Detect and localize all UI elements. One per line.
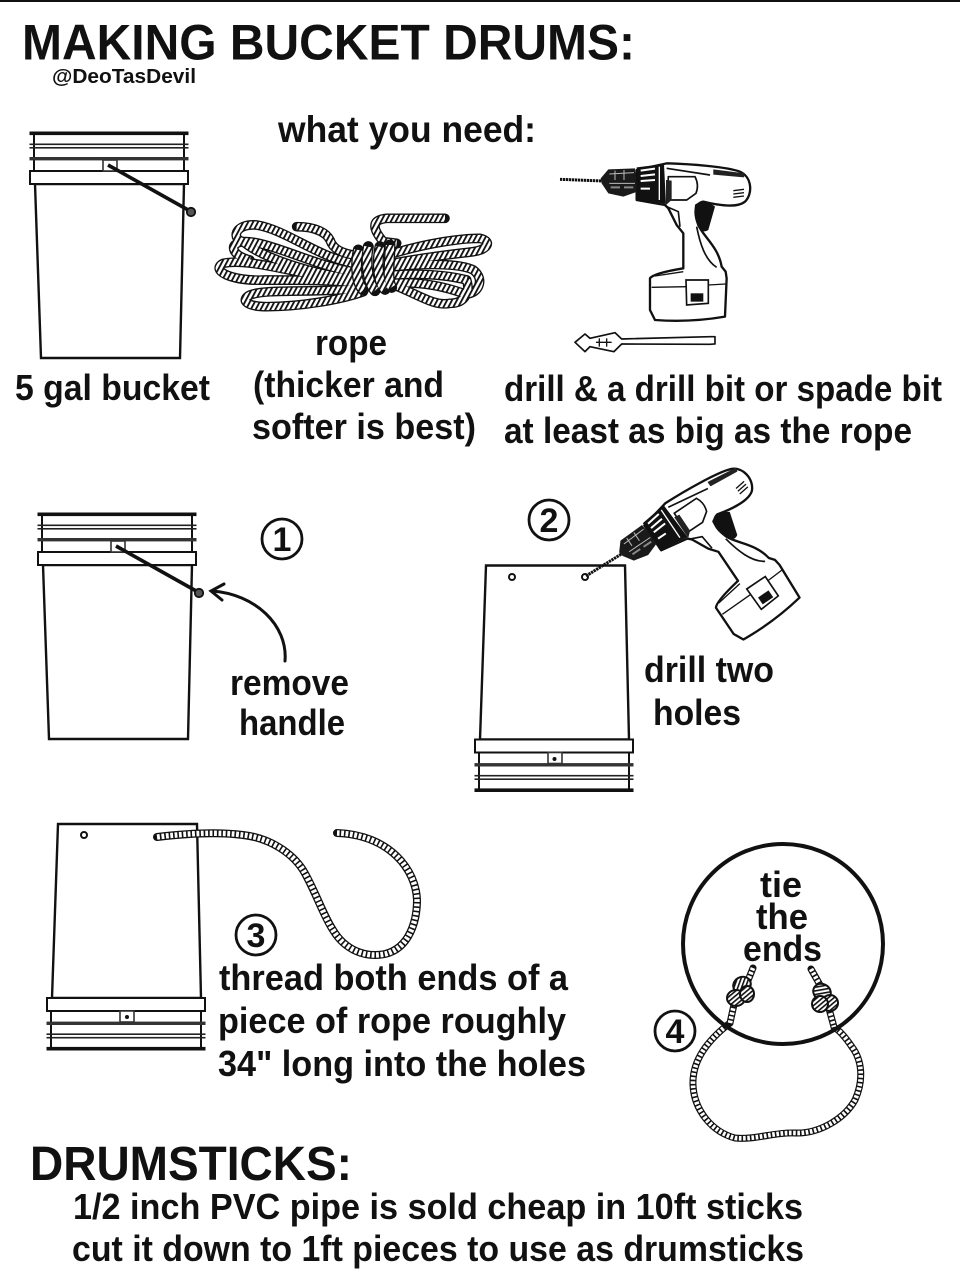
label: thread instructions: 34" long into the holes (218, 1043, 586, 1084)
label: 5 gal bucket: 5 gal bucket (15, 367, 210, 408)
label: rope: rope (315, 322, 387, 363)
label: thread instructions: piece of rope roughly (218, 1000, 566, 1041)
label: tie the ends (743, 864, 822, 969)
author handle: @DeoTasDevil (52, 66, 196, 88)
step 3: upside-down bucket (46, 824, 206, 1050)
label: thread instructions (218, 957, 586, 1084)
step number 4: 4 (666, 1013, 685, 1051)
label: drill two holes: drill two (644, 649, 774, 690)
step 1: bucket with handle (38, 512, 203, 739)
step number 1: 1 (273, 521, 291, 559)
label: remove handle: remove (230, 662, 349, 703)
label: tie the ends: ends (743, 928, 822, 969)
step number 2: 2 (540, 502, 558, 540)
heading: drumsticks: DRUMSTICKS: (30, 1138, 352, 1191)
step number 3 (236, 915, 276, 955)
drumsticks instructions: 1/2 inch PVC pipe is sold cheap in 10ft sticks (73, 1186, 803, 1227)
rope ends hatch (730, 968, 834, 1027)
icon: drill drilling hole (577, 456, 823, 693)
step number 4 (655, 1011, 695, 1051)
label: rope: (thicker and (253, 364, 444, 405)
label: remove handle (230, 662, 349, 743)
top border line (0, 0, 960, 2)
rope ends (730, 968, 834, 1027)
label: rope (252, 322, 476, 447)
label: rope: softer is best) (252, 406, 476, 447)
title: MAKING BUCKET DRUMS: (22, 14, 635, 70)
step number 2 (529, 500, 569, 540)
label: thread instructions: thread both ends of a (219, 957, 569, 998)
knot: right (810, 981, 838, 1012)
label: drill two holes: holes (653, 692, 741, 733)
label: drill and bit: at least as big as the rope (504, 410, 912, 451)
knot: left (727, 974, 754, 1006)
drumsticks instructions: cut it down to 1ft pieces to use as drumsticks (72, 1228, 804, 1269)
rope loop with knots (693, 968, 861, 1138)
icon: cordless drill (560, 163, 750, 321)
rope threaded through bucket (157, 833, 417, 955)
label: tie the ends: tie (760, 864, 802, 905)
label: remove handle: handle (239, 702, 345, 743)
icon: bucket with handle (30, 132, 195, 358)
label: drill and bit (504, 368, 942, 451)
heading: what you need: what you need: (277, 109, 536, 150)
icon: coiled rope (219, 218, 487, 307)
label: tie the ends: the (756, 896, 808, 937)
drumsticks instructions (72, 1186, 804, 1269)
arrow: to handle (211, 584, 285, 661)
icon: spade bit (575, 333, 715, 352)
step number 1 (262, 519, 302, 559)
magnifier circle (683, 844, 883, 1044)
step 2: upside-down bucket with holes (474, 566, 634, 792)
step number 3: 3 (247, 917, 265, 955)
label: drill two holes (644, 649, 774, 733)
